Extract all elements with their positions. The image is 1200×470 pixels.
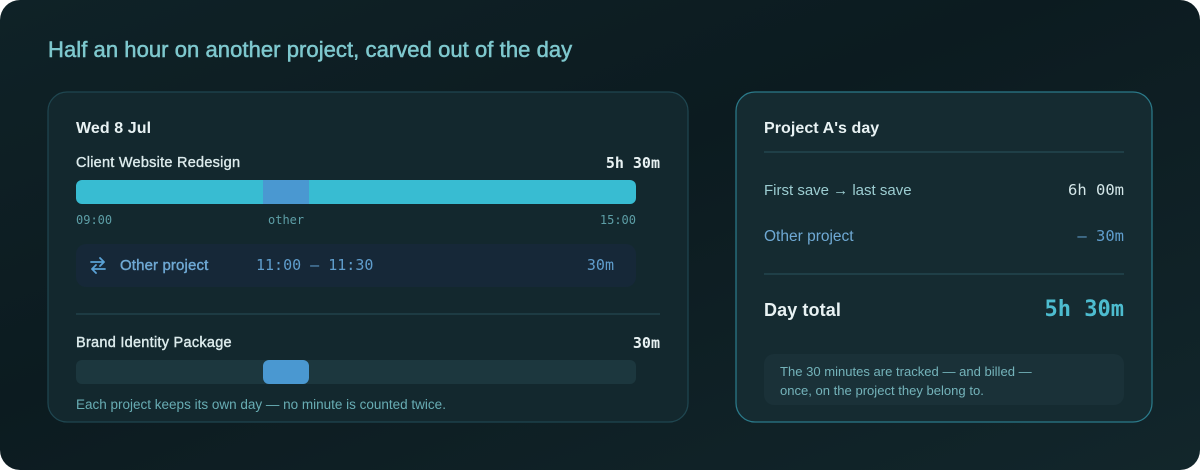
project A timeline bar xyxy=(76,180,636,204)
other project segment xyxy=(263,180,309,204)
project A duration: 5h 30m xyxy=(606,154,660,172)
note text xyxy=(780,364,1032,398)
panel: project A's day xyxy=(735,91,1153,423)
row value: 6h 00m xyxy=(1068,181,1124,199)
row: first save to last save xyxy=(764,181,1124,199)
note box xyxy=(764,354,1124,405)
project B segment xyxy=(263,360,309,384)
end time label: 15:00 xyxy=(600,213,636,227)
heading: date: Wed 8 Jul xyxy=(76,120,151,137)
project B name: Brand Identity Package xyxy=(76,335,232,351)
row label: Other project xyxy=(764,228,854,245)
project A row xyxy=(76,154,660,227)
project B duration: 30m xyxy=(633,334,660,352)
panel footnote: Each project keeps its own day — no minute is counted twice. xyxy=(76,397,446,412)
project B row xyxy=(76,334,660,384)
heading: project A's day: Project A's day xyxy=(764,120,879,137)
callout time range: 11:00 – 11:30 xyxy=(256,256,373,274)
title: Half an hour on another project, carved out of the day xyxy=(48,37,572,62)
panel: day timeline xyxy=(47,91,689,423)
row: other project deduction xyxy=(764,227,1124,245)
total label: Day total xyxy=(764,300,841,320)
other project callout xyxy=(76,244,636,287)
project A name: Client Website Redesign xyxy=(76,154,240,170)
row label: First save → last save xyxy=(764,182,912,199)
other label: other xyxy=(268,213,304,227)
note text: once, on the project they belong to. xyxy=(780,383,984,398)
total value: 5h 30m xyxy=(1045,297,1124,322)
note text: The 30 minutes are tracked — and billed — xyxy=(780,364,1032,379)
icon: swap arrows xyxy=(90,257,106,274)
callout duration: 30m xyxy=(587,256,614,274)
row value: – 30m xyxy=(1077,227,1124,245)
row: day total xyxy=(764,297,1124,322)
start time label: 09:00 xyxy=(76,213,112,227)
project B track xyxy=(76,360,636,384)
callout label: Other project xyxy=(120,257,208,274)
